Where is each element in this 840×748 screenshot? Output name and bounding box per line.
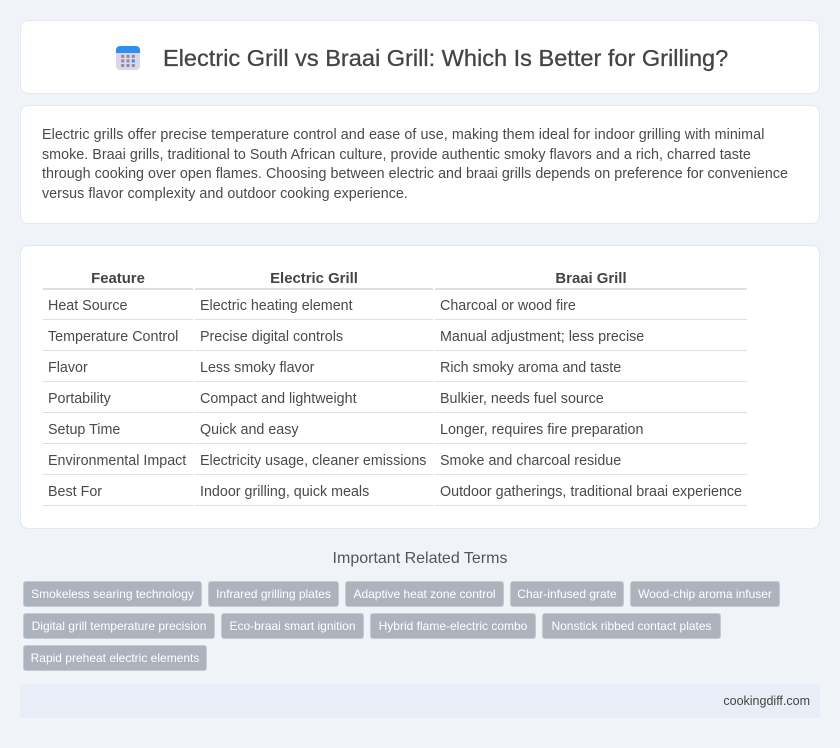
row: temperature control: Manual adjustment; less precise — [440, 329, 644, 345]
row: best for: Indoor grilling, quick meals — [200, 484, 369, 500]
row: heat source: Heat Source — [48, 298, 127, 314]
row: environmental impact: Electricity usage, cleaner emissions — [200, 453, 426, 469]
tag: Rapid preheat electric elements — [31, 651, 199, 665]
intro paragraph: Electric grills offer precise temperature control and ease of use, making them ideal for indoor grilling with minimal — [42, 127, 764, 143]
row: temperature control: Temperature Control — [48, 329, 178, 345]
tag: Digital grill temperature precision — [32, 619, 206, 633]
table column headers: Feature — [91, 271, 145, 287]
row: portability: Compact and lightweight — [200, 391, 357, 407]
panel: related term tags — [23, 581, 780, 671]
tag: Wood-chip aroma infuser — [638, 587, 772, 601]
row: environmental impact — [48, 453, 621, 469]
tag — [23, 645, 207, 671]
tag: Infrared grilling plates — [216, 587, 331, 601]
heading: related terms: Important Related Terms — [333, 550, 507, 567]
row: best for: Outdoor gatherings, traditional braai experience — [440, 484, 742, 500]
table column headers — [91, 271, 627, 287]
row: temperature control: Precise digital controls — [200, 329, 343, 345]
intro paragraph: through cooking over open flames. Choosing between electric and braai grills depends on preference for convenience — [42, 166, 788, 182]
tag — [630, 581, 780, 607]
tag — [542, 613, 721, 639]
tag: Hybrid flame-electric combo — [379, 619, 527, 633]
tag — [208, 581, 339, 607]
row: temperature control — [48, 329, 644, 345]
row: environmental impact: Environmental Impact — [48, 453, 186, 469]
row: portability: Bulkier, needs fuel source — [440, 391, 604, 407]
row: flavor: Rich smoky aroma and taste — [440, 360, 621, 376]
row: setup time — [48, 422, 643, 438]
footer source: cookingdiff.com — [723, 694, 810, 708]
row: portability — [48, 391, 604, 407]
tag: Char-infused grate — [517, 587, 617, 601]
row: heat source — [48, 298, 576, 314]
row: setup time: Quick and easy — [200, 422, 299, 438]
tag — [510, 581, 624, 607]
intro paragraph — [42, 127, 788, 202]
tag — [345, 581, 504, 607]
intro paragraph: versus flavor complexity and outdoor cooking experience. — [42, 186, 408, 202]
panel: comparison table — [20, 245, 820, 529]
row: heat source: Charcoal or wood fire — [440, 298, 576, 314]
tag: Adaptive heat zone control — [353, 587, 496, 601]
row: environmental impact: Smoke and charcoal residue — [440, 453, 621, 469]
tag: Eco-braai smart ignition — [229, 619, 356, 633]
panel: intro text — [20, 105, 820, 224]
table column headers: Braai Grill — [555, 271, 627, 287]
title: Electric Grill vs Braai Grill: Which Is Better for Grilling? — [163, 45, 728, 71]
panel: title header — [20, 20, 820, 94]
row: flavor — [48, 360, 621, 376]
tag — [370, 613, 536, 639]
tag — [221, 613, 364, 639]
row: setup time: Setup Time — [48, 422, 120, 438]
tag: Nonstick ribbed contact plates — [551, 619, 712, 633]
tag: Smokeless searing technology — [31, 587, 194, 601]
table column headers: Electric Grill — [270, 271, 358, 287]
row: best for: Best For — [48, 484, 102, 500]
tag — [23, 613, 215, 639]
footer bar — [20, 684, 820, 718]
row: best for — [48, 484, 742, 500]
icon: calendar — [116, 46, 140, 70]
intro paragraph: smoke. Braai grills, traditional to South African culture, provide authentic smoky flavors and a rich, charred taste — [42, 146, 751, 162]
tag — [23, 581, 202, 607]
row: setup time: Longer, requires fire preparation — [440, 422, 643, 438]
row: heat source: Electric heating element — [200, 298, 353, 314]
row: flavor: Less smoky flavor — [200, 360, 314, 376]
row: portability: Portability — [48, 391, 111, 407]
row: flavor: Flavor — [48, 360, 88, 376]
